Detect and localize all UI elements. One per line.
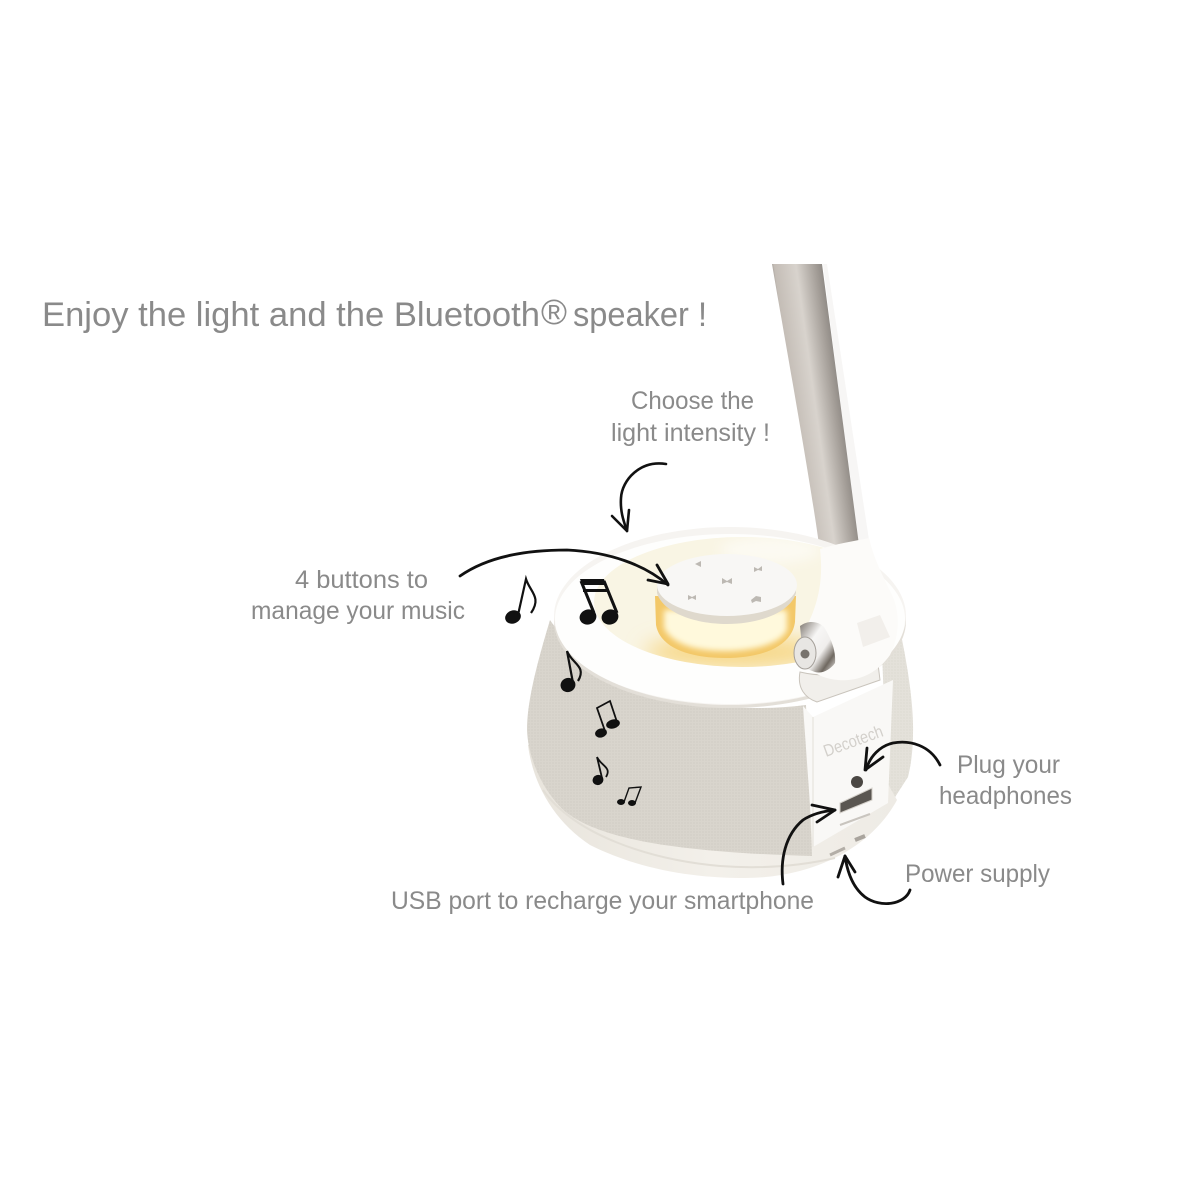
label: headphones: headphones	[939, 782, 1072, 810]
power socket marks	[830, 848, 845, 855]
note: single left	[504, 579, 536, 625]
illuminated tray	[594, 537, 824, 667]
lamp pole	[772, 264, 869, 552]
note: small single	[592, 757, 608, 786]
title: speaker !	[573, 296, 707, 334]
arrow: power	[838, 856, 910, 904]
music buttons	[688, 561, 762, 603]
speaker fabric	[527, 620, 812, 856]
label: light intensity	[611, 387, 770, 447]
label: headphones: Plug your	[957, 751, 1060, 779]
music notes	[504, 579, 641, 806]
label: light intensity: Choose the	[631, 387, 754, 415]
arrow: light intensity	[612, 463, 666, 531]
chrome knob	[794, 622, 835, 673]
brand label: Decotech	[821, 722, 886, 761]
title	[42, 293, 707, 334]
arrow: headphones	[865, 742, 940, 770]
light ring glow	[655, 596, 796, 658]
arrow: USB	[782, 805, 835, 884]
headphone jack	[851, 776, 863, 788]
white connector panel	[799, 664, 893, 855]
product: lamp base with speaker	[527, 264, 913, 878]
touch control disc	[657, 554, 797, 624]
USB label	[840, 814, 870, 825]
arrow: music buttons	[460, 550, 668, 585]
port slot outline	[799, 664, 880, 702]
title: Enjoy the light and the Bluetooth	[42, 296, 540, 334]
label: power supply: Power supply	[905, 860, 1050, 888]
title: ®	[541, 293, 567, 332]
label: music buttons: 4 buttons to	[295, 566, 428, 594]
note: small beamed	[618, 787, 641, 806]
note: single on fabric	[559, 651, 581, 694]
note: beamed outline	[595, 701, 620, 738]
base bottom shell	[528, 740, 897, 878]
label: music buttons: manage your music	[251, 597, 465, 625]
label: music buttons	[251, 566, 465, 625]
label: headphones	[939, 751, 1072, 810]
note: beamed large	[578, 579, 620, 626]
lamp arm joint	[794, 538, 898, 680]
USB port	[840, 788, 872, 813]
label: light intensity: light intensity !	[611, 419, 770, 447]
label: USB port: USB port to recharge your smartphone	[391, 887, 814, 915]
top rim	[554, 527, 906, 708]
rear fabric on right	[880, 600, 913, 808]
